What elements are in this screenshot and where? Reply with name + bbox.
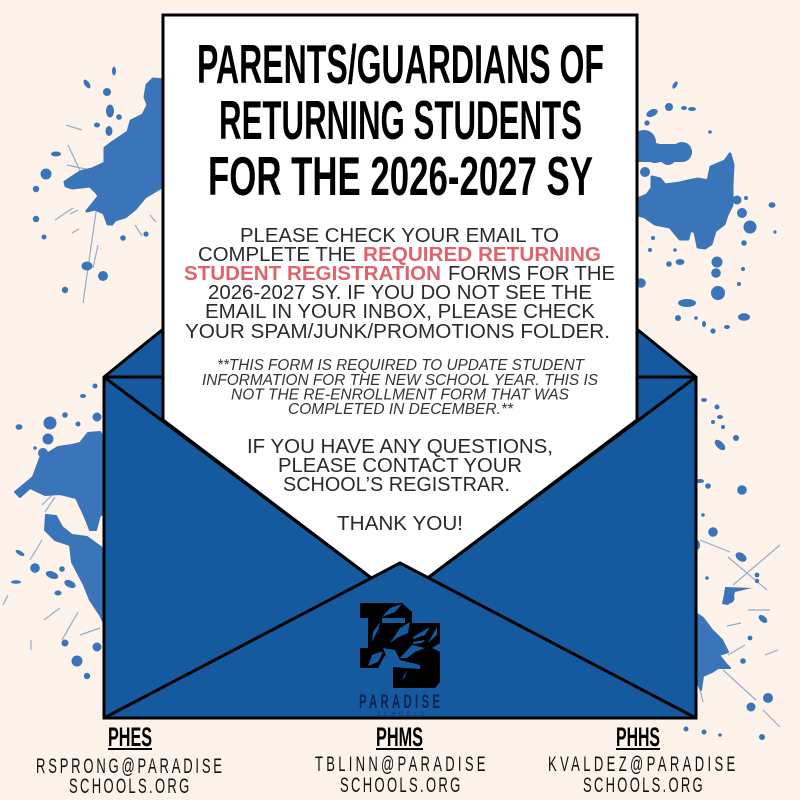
contact message: SCHOOL’S REGISTRAR.	[283, 474, 510, 496]
italic note: NOT THE RE-ENROLLMENT FORM THAT WAS	[231, 386, 570, 404]
main message text: FORMS FOR THE	[448, 263, 615, 285]
contact: PHMS: SCHOOLS.ORG	[340, 773, 460, 797]
paint splatter: lower left	[11, 384, 105, 679]
main message text	[184, 225, 615, 343]
logo sub-wordmark: SCHOOLS	[377, 712, 424, 718]
envelope: bottom front flap	[104, 563, 696, 718]
envelope: inner back panel	[104, 377, 696, 577]
thank you: THANK YOU!	[337, 513, 463, 535]
logo wordmark: PARADISE	[359, 692, 440, 713]
envelope: back flap	[104, 330, 696, 377]
contact message	[247, 436, 553, 496]
envelope: fold lines and outline	[104, 377, 696, 718]
letter paper	[163, 15, 637, 600]
main message text: 2026-2027 SY. IF YOU DO NOT SEE THE	[208, 282, 592, 304]
title	[197, 33, 604, 207]
envelope	[104, 15, 696, 718]
contact: PHHS: PHHS	[616, 722, 660, 752]
contact: PHHS: SCHOOLS.ORG	[583, 773, 703, 797]
main message text: REQUIRED RETURNING	[363, 244, 601, 266]
contact message: PLEASE CONTACT YOUR	[278, 455, 522, 477]
paint streaks: top left	[55, 125, 156, 303]
main message text: STUDENT REGISTRATION	[184, 263, 441, 285]
contact: PHES: RSPRONG@PARADISE	[36, 754, 222, 778]
contact message: IF YOU HAVE ANY QUESTIONS,	[247, 436, 553, 458]
paint streaks: lower right	[700, 540, 780, 727]
envelope: right front fold	[400, 377, 696, 718]
logo: Paradise Schools	[359, 603, 440, 718]
contact: PHMS	[315, 722, 486, 797]
italic note: COMPLETED IN DECEMBER.**	[288, 401, 514, 418]
contact: PHES: PHES	[108, 722, 152, 752]
main message text: PLEASE CHECK YOUR EMAIL TO	[240, 225, 559, 247]
contact: PHMS: TBLINN@PARADISE	[315, 752, 486, 776]
italic note: INFORMATION FOR THE NEW SCHOOL YEAR. THIS IS	[202, 372, 599, 389]
title: FOR THE 2026-2027 SY	[208, 145, 593, 207]
main message text: EMAIL IN YOUR INBOX, PLEASE CHECK	[205, 301, 596, 323]
main message text: YOUR SPAM/JUNK/PROMOTIONS FOLDER.	[185, 321, 610, 343]
contact: PHHS: KVALDEZ@PARADISE	[548, 752, 735, 776]
paint splatter: top right	[632, 81, 777, 334]
paint splatter: top left	[33, 66, 165, 293]
contact: PHMS: PHMS	[376, 722, 423, 752]
paint streaks: lower left	[3, 495, 100, 650]
main message text: COMPLETE THE	[198, 244, 356, 266]
contact: PHHS	[548, 722, 735, 797]
paint splatter: lower right	[684, 398, 773, 740]
envelope: left front fold	[104, 377, 400, 718]
italic note	[202, 357, 599, 418]
italic note: **THIS FORM IS REQUIRED TO UPDATE STUDENT	[217, 357, 586, 374]
contact: PHES	[36, 722, 222, 798]
contact: PHES: SCHOOLS.ORG	[69, 774, 189, 798]
logo monogram	[360, 603, 440, 688]
